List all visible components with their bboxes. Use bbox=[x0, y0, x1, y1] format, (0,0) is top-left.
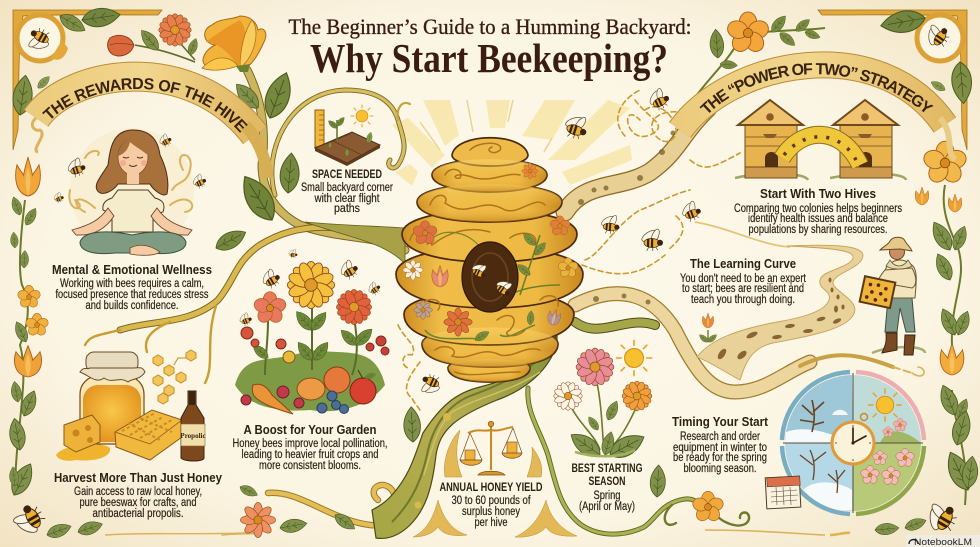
illustration: meditating woman bbox=[52, 128, 208, 255]
heading: ANNUAL HONEY YIELD bbox=[440, 482, 542, 494]
body: Small backyard corner bbox=[301, 182, 393, 194]
body: be ready for the spring bbox=[673, 452, 767, 464]
hive decorations bbox=[403, 143, 579, 382]
dashed bee flight paths bbox=[398, 90, 790, 413]
icon: climbing leaf bbox=[649, 465, 666, 497]
body bbox=[673, 431, 767, 475]
body: and builds confidence. bbox=[86, 300, 178, 312]
small bees on ribbon bbox=[578, 130, 676, 304]
corner ornament top left bbox=[11, 6, 162, 150]
panel: a boost for your garden bbox=[232, 249, 389, 472]
icon: small tulip bbox=[698, 313, 718, 344]
banner text: THE REWARDS OF THE HIVE bbox=[42, 78, 248, 133]
panel: space needed bbox=[301, 105, 393, 215]
body bbox=[74, 486, 202, 520]
panel: annual honey yield bbox=[413, 421, 577, 537]
banner: the power of two strategy bbox=[669, 51, 957, 162]
body: to start; bees are resilient and bbox=[682, 283, 804, 295]
hive entrance bbox=[462, 242, 518, 312]
illustration: flowers and produce bbox=[235, 249, 389, 414]
body: (April or May) bbox=[579, 501, 635, 513]
panel: harvest more than just honey bbox=[54, 350, 223, 520]
clock bbox=[832, 414, 874, 464]
gold flourishes bbox=[413, 430, 577, 537]
body: You don't need to be an expert bbox=[680, 273, 807, 285]
body bbox=[579, 490, 635, 513]
body: more consistent blooms. bbox=[259, 460, 361, 472]
heading bbox=[572, 463, 643, 488]
icon: balance scale bbox=[460, 421, 522, 475]
panel: mental and emotional wellness bbox=[52, 128, 212, 312]
body: pure beeswax for crafts, and bbox=[80, 497, 196, 509]
body: 30 to 60 pounds of bbox=[452, 495, 531, 507]
body: teach you through doing. bbox=[691, 294, 795, 306]
body: focused presence that reduces stress bbox=[56, 289, 209, 301]
right border vine bbox=[915, 141, 980, 505]
body: Gain access to raw local honey, bbox=[74, 486, 202, 498]
body bbox=[56, 278, 209, 312]
heading: Harvest More Than Just Honey bbox=[54, 470, 223, 485]
heading: SEASON bbox=[588, 476, 626, 488]
banner: the rewards of the hive bbox=[24, 62, 274, 178]
body: identify health issues and balance bbox=[748, 213, 888, 225]
body: Working with bees requires a calm, bbox=[60, 278, 204, 290]
panel: best starting season bbox=[549, 340, 666, 513]
body bbox=[452, 495, 531, 529]
heading: SPACE NEEDED bbox=[312, 167, 382, 181]
body: Spring bbox=[594, 490, 620, 502]
body: blooming season. bbox=[684, 463, 756, 475]
corner ornament top right bbox=[818, 8, 973, 150]
heading: A Boost for Your Garden bbox=[244, 422, 377, 437]
body: with clear flight bbox=[314, 193, 380, 205]
body: paths bbox=[334, 203, 360, 215]
left border vine bbox=[7, 157, 49, 499]
illustration: honey jar, comb and propolis bbox=[56, 350, 206, 461]
heading: Start With Two Hives bbox=[760, 186, 876, 201]
body: leading to heavier fruit crops and bbox=[242, 449, 378, 461]
title line 2: Why Start Beekeeping? bbox=[310, 35, 668, 81]
illustration: honey jar, comb and propolis: Propolic bbox=[180, 432, 206, 440]
bottom florals bbox=[45, 406, 928, 541]
road / learning path bbox=[697, 245, 863, 380]
panel: start with two hives bbox=[734, 100, 906, 236]
body bbox=[680, 273, 807, 306]
vine network bbox=[85, 70, 749, 535]
heading: Mental & Emotional Wellness bbox=[52, 262, 212, 277]
heading: BEST STARTING bbox=[572, 463, 643, 475]
illustration: beekeeper bbox=[860, 237, 925, 355]
badge: NotebookLM bbox=[906, 535, 980, 547]
panel: timing your start bbox=[672, 372, 924, 514]
big yellow flower bbox=[202, 16, 301, 255]
seasonal clock wheel bbox=[782, 372, 924, 514]
icon: plot with ruler and sun bbox=[315, 105, 380, 166]
illustration: spring flowers and sun bbox=[549, 340, 656, 463]
body bbox=[232, 438, 388, 472]
olive trunk under hive bbox=[305, 222, 557, 538]
body bbox=[301, 182, 393, 215]
banner text: THE “POWER OF TWO” STRATEGY bbox=[700, 63, 934, 113]
body: surplus honey bbox=[462, 506, 520, 518]
body: Research and order bbox=[680, 431, 760, 443]
body: populations by sharing resources. bbox=[748, 224, 888, 236]
body bbox=[734, 203, 902, 236]
top right florals bbox=[680, 12, 825, 120]
title line 1: The Beginner’s Guide to a Humming Backyard: bbox=[288, 14, 692, 39]
top left florals bbox=[108, 9, 200, 62]
sun rays behind hive bbox=[392, 100, 632, 186]
illustration: two hives and bee bridge bbox=[735, 100, 906, 180]
central beehive bbox=[396, 138, 583, 382]
heading: The Learning Curve bbox=[690, 256, 796, 271]
body: equipment in winter to bbox=[673, 442, 767, 454]
body: Honey bees improve local pollination, bbox=[232, 438, 388, 450]
icon: calendar bbox=[765, 476, 801, 509]
body: Comparing two colonies helps beginners bbox=[734, 203, 902, 215]
ribbon trails to the right of the hive bbox=[565, 108, 924, 392]
heading: Timing Your Start bbox=[672, 414, 769, 429]
title bbox=[288, 14, 692, 81]
footprints bbox=[716, 278, 845, 361]
body: antibacterial propolis. bbox=[92, 508, 184, 520]
body: per hive bbox=[474, 517, 508, 529]
panel: the learning curve bbox=[680, 237, 925, 355]
